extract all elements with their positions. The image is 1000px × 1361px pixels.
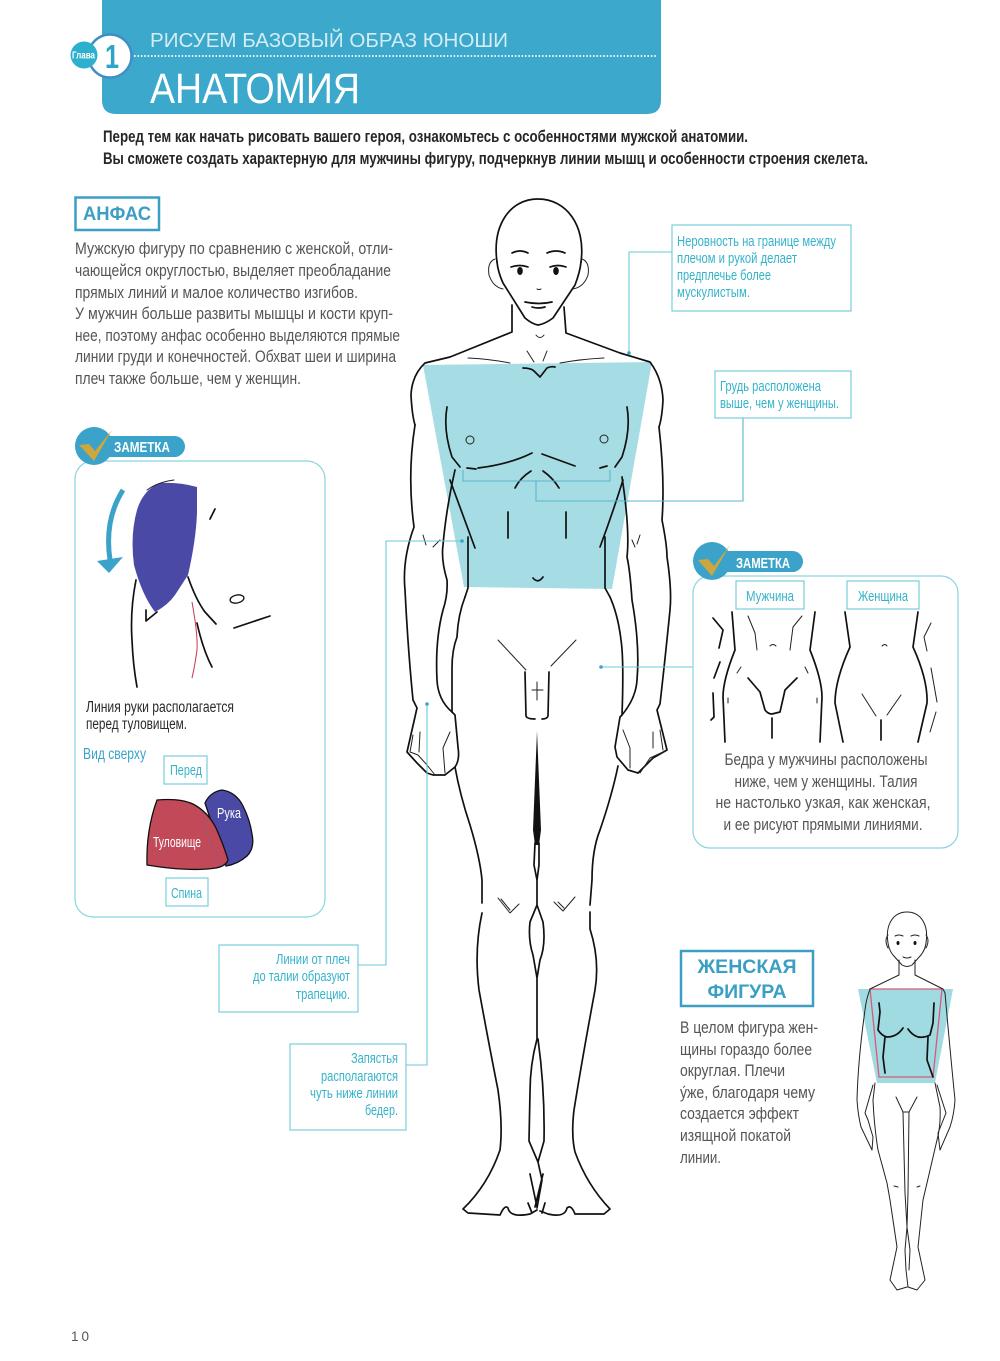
chapter header banner xyxy=(70,0,661,114)
neck and shoulders xyxy=(411,305,663,427)
arm line caption: перед туловищем. xyxy=(86,716,187,733)
top view diagram: arm and torso: Рука xyxy=(217,806,242,822)
label: male: Мужчина xyxy=(746,589,795,605)
hips and outer legs xyxy=(452,597,623,1215)
chapter label circle: Глава xyxy=(72,50,95,62)
heading: front view xyxy=(76,198,159,230)
note badge xyxy=(75,427,185,465)
arms and fists xyxy=(404,425,671,775)
callout: chest position: выше, чем у женщины. xyxy=(720,396,839,412)
female figure illustration xyxy=(857,912,955,1290)
banner background xyxy=(102,0,661,114)
female figure text block: изящной покатой xyxy=(680,1127,791,1145)
top view diagram: arm and torso xyxy=(147,790,253,869)
callout: chest position xyxy=(715,371,851,418)
heading: female figure: ЖЕНСКАЯ xyxy=(696,956,796,978)
front view text block: чающейся округлостью, выделяет преобладание xyxy=(75,262,391,280)
callout: forearm muscle: Неровность на границе между xyxy=(677,234,837,250)
red rectangle guide xyxy=(870,989,942,1077)
arm line caption xyxy=(86,699,234,733)
page number: 10 xyxy=(71,1329,89,1344)
front view text block xyxy=(75,240,400,388)
arm line drawing xyxy=(132,480,270,687)
trapezoid highlight xyxy=(858,989,953,1083)
female figure text block xyxy=(680,1019,818,1167)
callout: trapezoid: до талии образуют xyxy=(253,969,350,985)
inner leg line xyxy=(528,731,545,1213)
callout: forearm muscle: мускулистым. xyxy=(677,285,750,301)
panel: note about arm line xyxy=(75,427,325,917)
male hips drawing xyxy=(711,612,822,742)
note badge: ЗАМЕТКА xyxy=(736,555,790,572)
front view text block: нее, поэтому анфас особенно выделяются прямые xyxy=(75,327,400,345)
male figure line drawing xyxy=(404,199,671,1215)
front view text block: плеч также больше, чем у женщин. xyxy=(75,370,301,388)
callout: forearm muscle: плечом и рукой делает xyxy=(677,251,797,267)
connector: hip note xyxy=(599,665,693,669)
front view text block: линии груди и конечностей. Обхват шеи и ширина xyxy=(75,348,397,366)
hips caption: и ее рисуют прямыми линиями. xyxy=(724,816,922,834)
trapezoid highlight on male torso xyxy=(423,362,652,589)
panel: note male vs female hips xyxy=(693,542,958,848)
callout: chest position: Грудь расположена xyxy=(720,379,822,395)
hips caption: не настолько узкая, как женская, xyxy=(716,794,930,812)
callout: wrists: располагаются xyxy=(321,1069,398,1085)
callout: wrists: бедер. xyxy=(365,1103,398,1119)
note badge xyxy=(693,542,803,580)
heading: female figure: ФИГУРА xyxy=(708,981,786,1003)
hips caption: ниже, чем у женщины. Талия xyxy=(734,773,918,791)
callout: forearm muscle: предплечье более xyxy=(677,268,771,284)
label: front xyxy=(164,756,207,784)
label: front: Перед xyxy=(170,763,202,779)
top view label: Вид сверху xyxy=(83,746,146,763)
heading: front view: АНФАС xyxy=(83,204,151,225)
female body outline xyxy=(857,912,955,1290)
connector: chest bracket xyxy=(463,418,743,501)
callout: wrists xyxy=(290,702,429,1130)
callout: trapezoid xyxy=(219,539,464,1012)
female figure text block: В целом фигура жен- xyxy=(680,1019,818,1037)
female figure text block: создается эффект xyxy=(680,1105,799,1123)
arm line caption: Линия руки располагается xyxy=(86,699,234,716)
female figure text block: линии. xyxy=(680,1149,721,1167)
top view diagram: arm and torso: Туловище xyxy=(153,835,201,851)
chapter subtitle: РИСУЕМ БАЗОВЫЙ ОБРАЗ ЮНОШИ xyxy=(150,28,508,52)
female hips drawing xyxy=(835,612,937,742)
label: back: Спина xyxy=(171,886,203,902)
groin and knees xyxy=(498,640,576,913)
arrow: downward curved xyxy=(97,490,123,573)
chapter title: АНАТОМИЯ xyxy=(150,65,360,113)
intro text: Перед тем как начать рисовать вашего героя, ознакомьтесь с особенностями мужской анатомии. xyxy=(103,127,748,146)
chest and abdomen xyxy=(446,335,628,597)
label: back xyxy=(166,878,208,906)
note badge: ЗАМЕТКА xyxy=(114,439,170,456)
icon: blue shoulder shape xyxy=(133,483,197,612)
hips caption: Бедра у мужчины расположены xyxy=(724,751,928,769)
label: female: Женщина xyxy=(858,589,909,605)
label: female xyxy=(847,581,919,609)
chapter label circle xyxy=(70,42,98,68)
chapter number: 1 xyxy=(105,38,119,75)
callout: trapezoid: трапецию. xyxy=(296,987,350,1003)
callout: forearm muscle xyxy=(627,225,851,355)
female figure text block: у́же, благодаря чему xyxy=(680,1084,816,1102)
female figure text block: щины гораздо более xyxy=(680,1041,812,1059)
female figure text block: округлая. Плечи xyxy=(680,1062,785,1080)
hips caption xyxy=(716,751,930,834)
chapter number xyxy=(88,34,132,78)
front view text block: прямых линий и малое количество изгибов. xyxy=(75,284,358,302)
callout: wrists: чуть ниже линии xyxy=(310,1086,398,1102)
intro text xyxy=(103,127,868,168)
front view text block: Мужскую фигуру по сравнению с женской, отли- xyxy=(75,240,393,258)
callout: wrists: Запястья xyxy=(351,1051,398,1067)
front view text block: У мужчин больше развиты мышцы и кости круп- xyxy=(75,305,393,323)
callout: trapezoid: Линии от плеч xyxy=(276,952,350,968)
head xyxy=(489,199,588,325)
label: male xyxy=(736,581,804,609)
heading: female figure xyxy=(681,951,813,1006)
